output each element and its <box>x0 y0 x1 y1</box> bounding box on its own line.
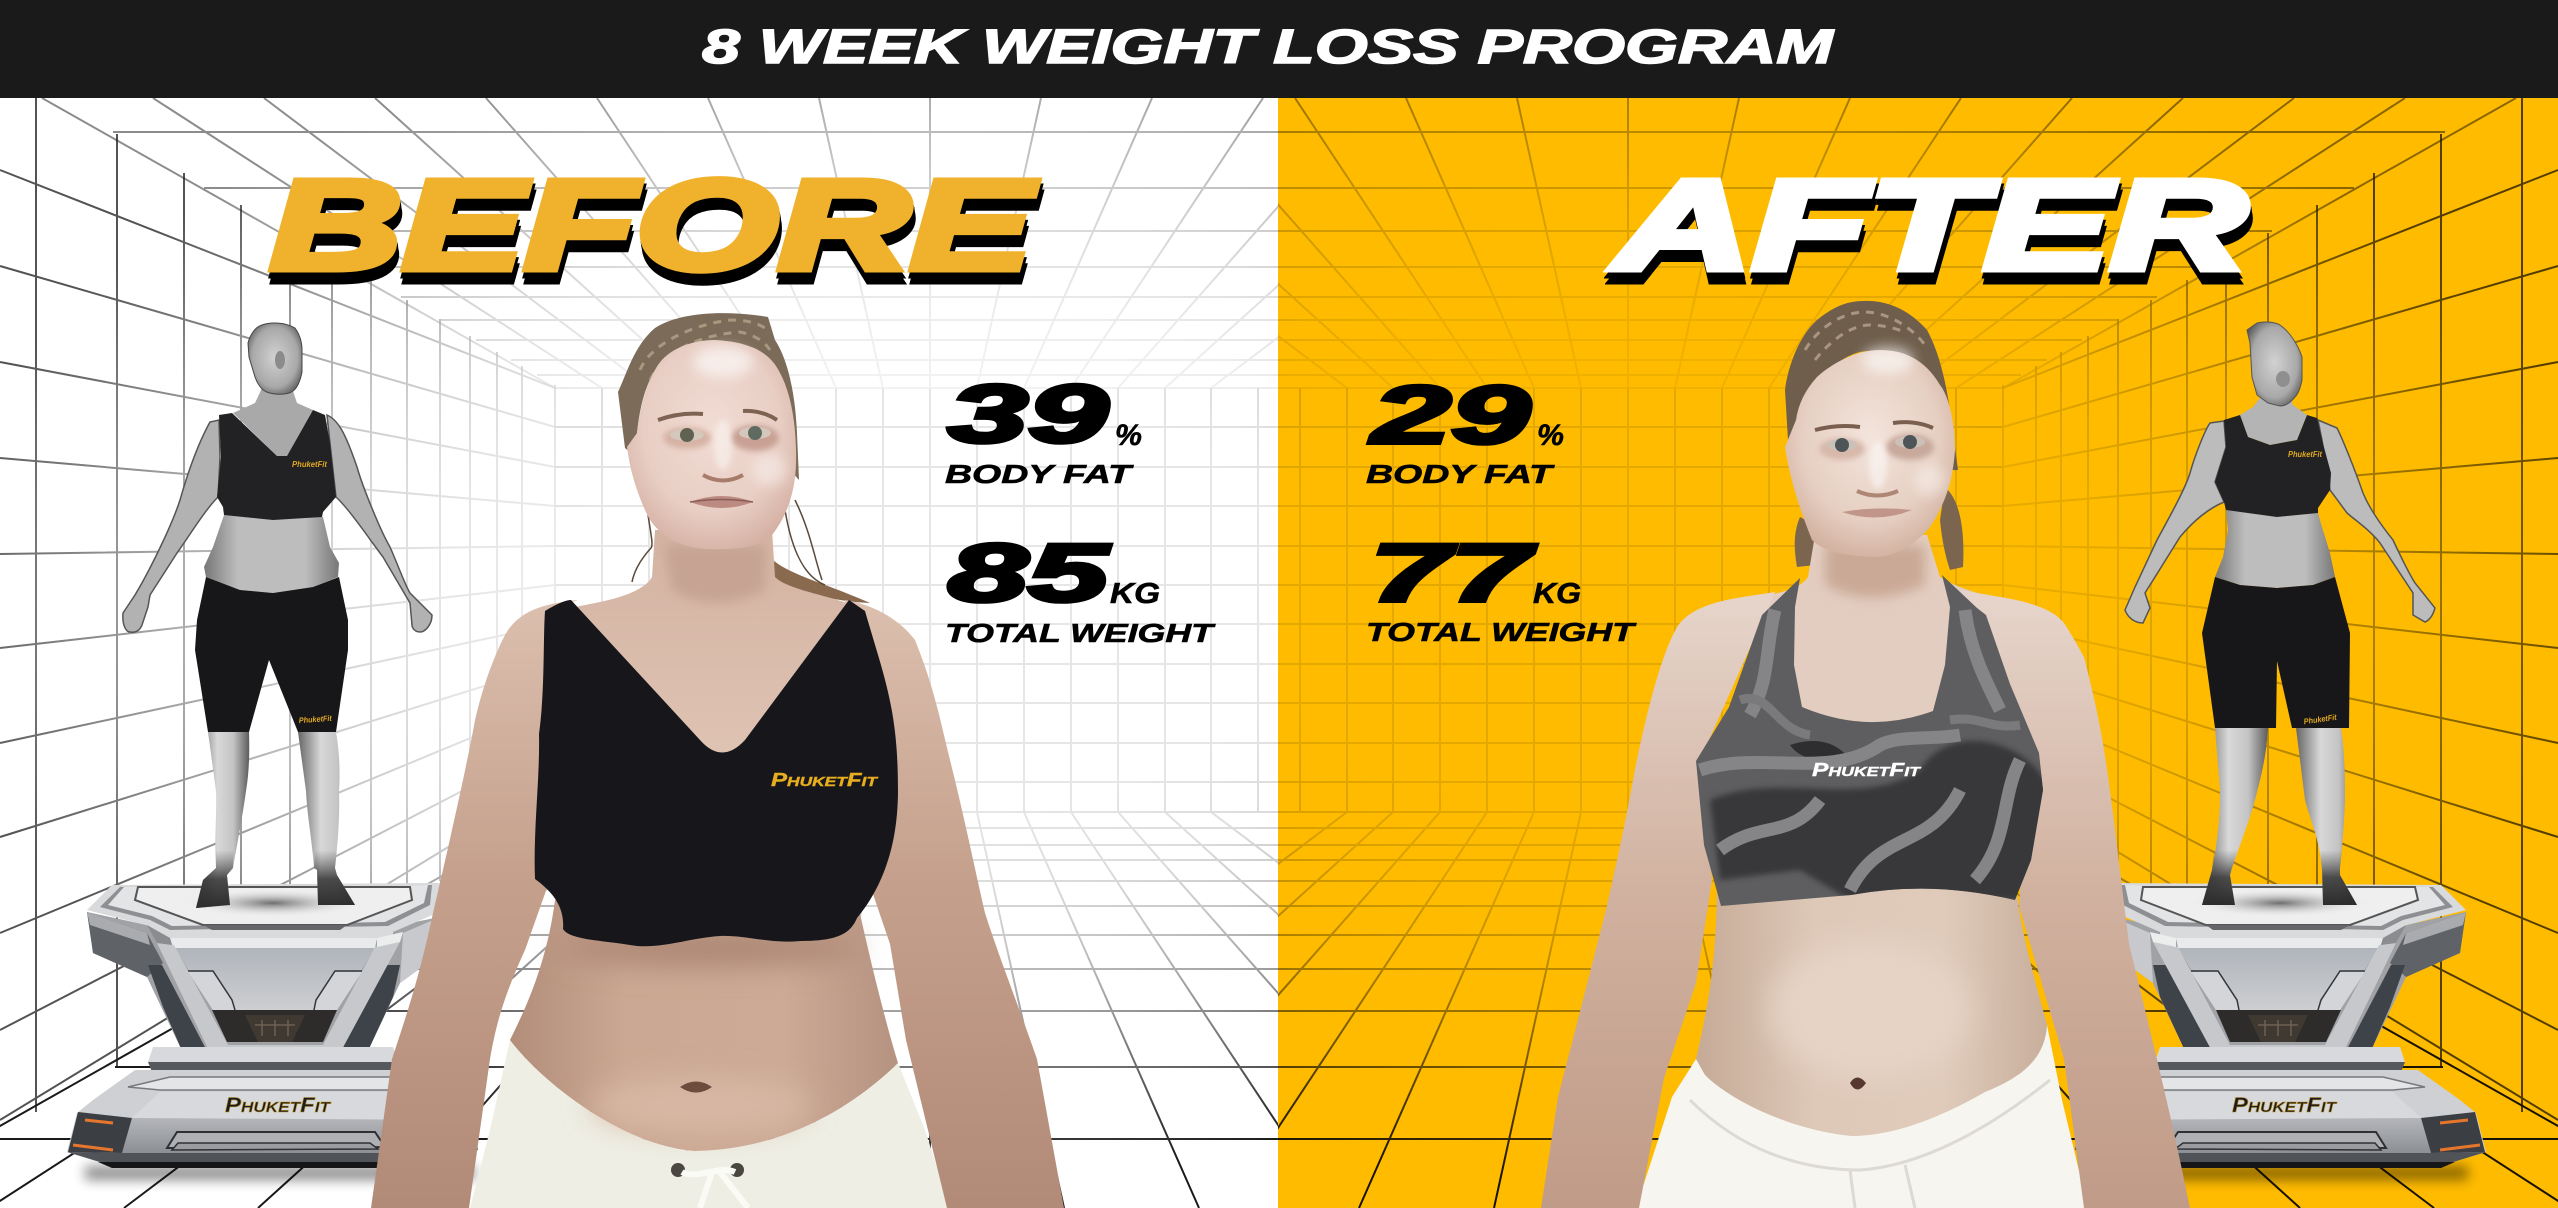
stat value: 39 percent <box>948 369 1142 460</box>
header bar <box>0 0 2558 98</box>
garment logos: PhuketFit <box>2288 450 2322 459</box>
right arm <box>845 600 1064 1208</box>
garment logos: PhuketFit <box>299 714 332 725</box>
person: after photo <box>1541 301 2190 1208</box>
right arm <box>1960 590 2190 1208</box>
pants waistband shading <box>1690 1080 2050 1208</box>
bra logo: PhuketFit <box>771 770 878 790</box>
drawstring <box>671 1163 748 1208</box>
stat value: 39 percent: 39 <box>948 369 1109 460</box>
stat label: body fat: BODY FAT <box>1366 459 1555 489</box>
garment logos <box>2288 450 2337 726</box>
3d body scan: after <box>2125 322 2435 905</box>
pedestal logo: PhuketFit <box>225 1094 332 1117</box>
stats: after <box>1366 370 1637 647</box>
person: before photo <box>371 313 1064 1208</box>
thin wet hair strands <box>632 500 825 585</box>
stat label: total weight: TOTAL WEIGHT <box>945 618 1216 648</box>
stat value: 77 kg <box>1370 528 1581 619</box>
panel: after background with perspective grid <box>1278 98 2558 1208</box>
garment logos: PhuketFit <box>292 460 327 469</box>
heading: after: AFTER <box>1611 154 2247 297</box>
left arm <box>1541 592 1775 1208</box>
bra <box>535 600 898 946</box>
stat value: 29 percent <box>1369 370 1564 461</box>
bra logo: PhuketFit <box>1812 760 1921 780</box>
stat label: total weight: TOTAL WEIGHT <box>1366 617 1637 647</box>
hair strand behind neck <box>765 560 870 603</box>
stat value: 29 percent: % <box>1537 419 1564 452</box>
header title: 8 WEEK WEIGHT LOSS PROGRAM <box>702 21 1834 74</box>
navel <box>680 1082 712 1092</box>
neck shadow <box>665 545 765 602</box>
pants <box>470 1040 950 1208</box>
head <box>627 340 796 549</box>
stat value: 77 kg: 77 <box>1370 528 1536 619</box>
camo bra <box>1696 575 2043 906</box>
belly shading <box>1770 940 1970 1080</box>
garment logos <box>292 460 332 725</box>
midriff <box>510 900 898 1151</box>
hair highlights <box>1805 312 1925 360</box>
stat value: 77 kg: KG <box>1533 578 1581 610</box>
hair cap <box>618 313 799 480</box>
head <box>1785 346 1955 557</box>
stat label: body fat: BODY FAT <box>945 459 1134 489</box>
panel: before background with perspective grid <box>0 98 1278 1208</box>
hair highlights <box>640 320 770 380</box>
stat value: 39 percent: % <box>1115 419 1142 452</box>
pedestal: before scanner <box>67 883 478 1180</box>
hair cap <box>1785 301 1958 470</box>
midriff <box>1680 880 2060 1170</box>
left arm <box>371 600 578 1208</box>
navel <box>1850 1078 1866 1090</box>
pedestal logo: PhuketFit <box>2232 1094 2338 1117</box>
hair locks <box>1795 487 1963 570</box>
stat value: 29 percent: 29 <box>1369 370 1531 461</box>
stat value: 85 kg: 85 <box>948 528 1110 619</box>
stat value: 85 kg <box>948 528 1160 619</box>
heading: before: BEFORE <box>270 154 1037 297</box>
pants <box>1636 1025 2088 1208</box>
pedestal: after scanner <box>2075 883 2486 1180</box>
garment logos: PhuketFit <box>2303 713 2337 726</box>
neck and chest <box>1740 535 2000 725</box>
3d body scan: before <box>123 323 432 908</box>
belly shading <box>560 930 860 1131</box>
stat value: 85 kg: KG <box>1110 578 1160 610</box>
neck shadow <box>1825 545 1925 598</box>
stats: before <box>945 369 1216 648</box>
neck and chest <box>545 530 868 775</box>
